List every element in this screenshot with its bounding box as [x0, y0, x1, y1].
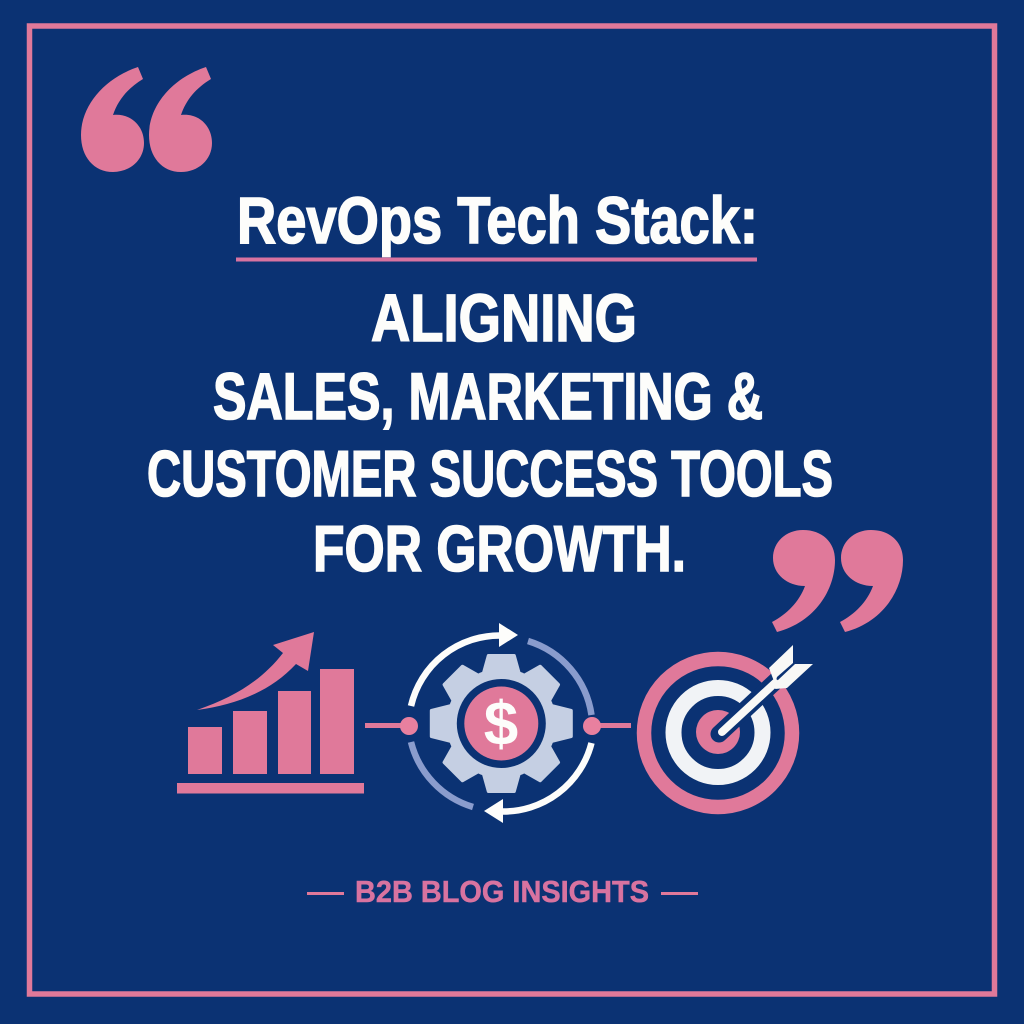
headline: SALES, MARKETING & — [213, 359, 763, 433]
headline — [147, 281, 833, 585]
headline: ALIGNING — [371, 281, 637, 356]
icon: growth bar chart with arrow — [177, 632, 364, 794]
icon: opening quotation mark — [81, 67, 212, 172]
cycle arrowheads — [499, 623, 518, 647]
icon: closing quotation mark — [772, 530, 903, 632]
title underline — [236, 258, 757, 262]
dollar sign: $ — [484, 690, 518, 759]
icon: gear with dollar and cycle arrows — [411, 623, 592, 823]
icon: target with arrow — [644, 645, 813, 807]
headline: FOR GROWTH. — [313, 512, 686, 585]
footer label: B2B BLOG INSIGHTS — [355, 874, 649, 909]
right connector — [583, 717, 631, 735]
title: RevOps Tech Stack: — [237, 183, 758, 257]
cycle arcs — [411, 635, 592, 812]
left connector — [365, 717, 418, 735]
gear — [431, 656, 571, 792]
